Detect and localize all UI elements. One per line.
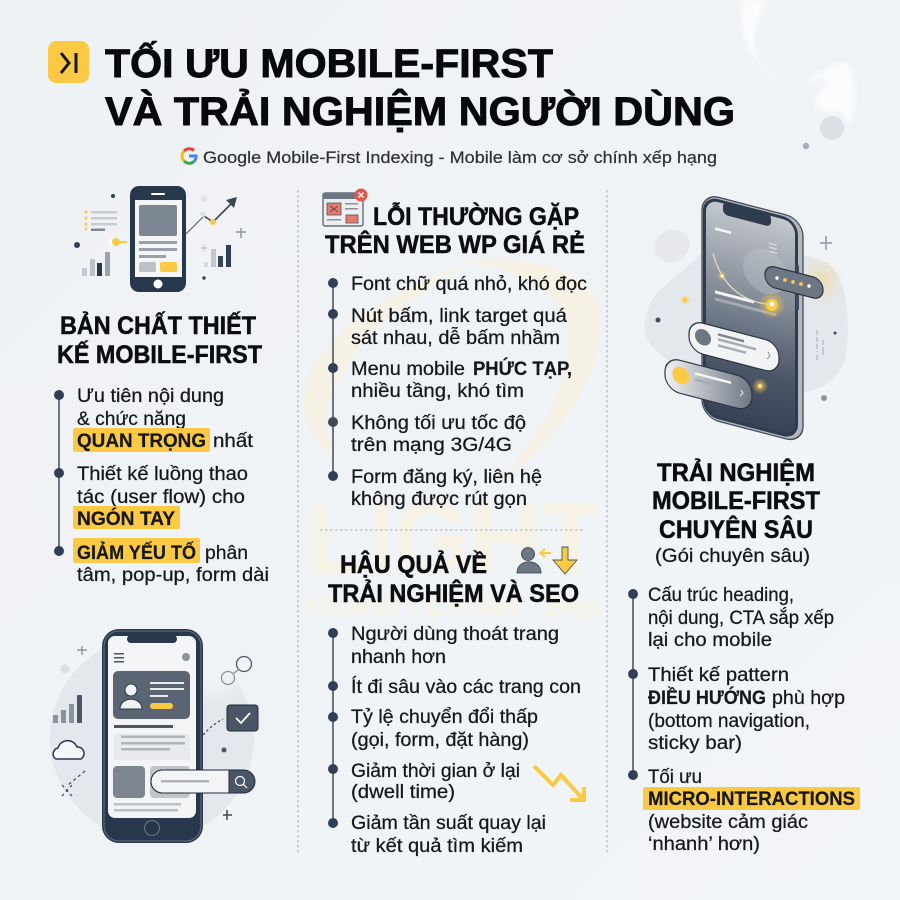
subtitle with Google icon: Google Mobile-First Indexing - Mobile làm cơ sở chính xếp hạng xyxy=(203,148,717,167)
list: loi thuong gap: không được rút gọn xyxy=(351,489,527,510)
heading: hau qua with icons: TRẢI NGHIỆM VÀ SEO xyxy=(328,578,579,608)
list: hau qua: (gọi, form, đặt hàng) xyxy=(351,730,529,751)
illustration: phone with charts xyxy=(74,186,246,292)
list: ban chat xyxy=(54,386,269,586)
list: loi thuong gap: Nút bấm, link target quá xyxy=(351,306,567,327)
list: hau qua: Ít đi sâu vào các trang con xyxy=(351,677,581,698)
list: hau qua: nhanh hơn xyxy=(351,647,446,668)
title: VÀ TRẢI NGHIỆM NGƯỜI DÙNG xyxy=(105,88,735,134)
heading: trai nghiem chuyen sau: CHUYÊN SÂU xyxy=(659,514,813,544)
list: ban chat: phân xyxy=(205,543,248,564)
list: chuyen sau: phù hợp xyxy=(772,688,845,709)
list: chuyen sau: lại cho mobile xyxy=(648,630,772,651)
list: loi thuong gap: PHỨC TẠP, xyxy=(473,358,572,380)
heading: ban chat: BẢN CHẤT THIẾT xyxy=(60,310,256,340)
list: loi thuong gap xyxy=(328,274,587,510)
list: hau qua: Giảm tần suất quay lại xyxy=(351,813,546,834)
heading: ban chat: KẾ MOBILE-FIRST xyxy=(57,340,262,369)
list: chuyen sau: ĐIỀU HƯỚNG xyxy=(648,687,766,709)
list: chuyen sau: ‘nhanh’ hơn) xyxy=(648,834,760,855)
search bar xyxy=(151,770,255,793)
illustration: phone with search bar xyxy=(50,629,258,843)
list: chuyen sau: MICRO-INTERACTIONS xyxy=(648,789,855,810)
list: hau qua: Người dùng thoát trang xyxy=(351,624,559,645)
list: ban chat: Ưu tiên nội dung xyxy=(77,386,224,407)
heading: trai nghiem chuyen sau: TRẢI NGHIỆM xyxy=(657,457,815,487)
list: hau qua: Giảm thời gian ở lại xyxy=(351,761,520,782)
list: hau qua: (dwell time) xyxy=(351,782,455,803)
arrow: falling yellow trend xyxy=(534,766,584,800)
list: ban chat: tác (user flow) cho xyxy=(77,487,245,508)
title: TỐI ƯU MOBILE-FIRST xyxy=(105,40,553,86)
heading: hau qua with icons xyxy=(328,547,579,608)
column dividers xyxy=(298,190,607,853)
list: ban chat: tâm, pop-up, form dài xyxy=(77,565,269,586)
list: ban chat: Thiết kế luồng thao xyxy=(77,464,248,485)
list: loi thuong gap: trên mạng 3G/4G xyxy=(351,435,512,456)
list: loi thuong gap: Font chữ quá nhỏ, khó đọc xyxy=(351,274,587,295)
heading: trai nghiem chuyen sau xyxy=(652,457,820,567)
heading: loi thuong gap with icon xyxy=(323,188,585,259)
list: loi thuong gap: Form đăng ký, liên hệ xyxy=(351,467,542,488)
list: chuyen sau: Tối ưu xyxy=(648,767,702,788)
list: ban chat: nhất xyxy=(213,431,254,452)
decorative white swoosh and dots, top right xyxy=(741,0,855,149)
illustration: tilted phone with floating cards xyxy=(644,183,848,448)
icon: Google G xyxy=(182,149,196,163)
heading: trai nghiem chuyen sau: (Gói chuyên sâu) xyxy=(655,546,810,567)
list: loi thuong gap: Không tối ưu tốc độ xyxy=(351,413,526,434)
heading: trai nghiem chuyen sau: MOBILE-FIRST xyxy=(652,487,820,515)
list: ban chat: & chức năng xyxy=(77,409,186,430)
list: chuyen sau: nội dung, CTA sắp xếp xyxy=(648,607,834,629)
watermark logo: Nhanh - Chuẩn - Đẹp xyxy=(305,591,602,621)
list: hau qua xyxy=(328,624,581,857)
list: chuyen sau xyxy=(628,585,860,855)
list: chuyen sau: (bottom navigation, xyxy=(648,711,810,732)
list: chuyen sau: Cấu trúc heading, xyxy=(648,585,794,606)
icon: yellow skip badge xyxy=(48,41,89,83)
icon: broken browser window xyxy=(323,188,368,226)
list: hau qua: từ kết quả tìm kiếm xyxy=(351,836,523,857)
list: ban chat: GIẢM YẾU TỐ xyxy=(77,542,196,564)
list: chuyen sau: (website cảm giác xyxy=(648,812,808,833)
title xyxy=(105,40,735,134)
heading: loi thuong gap with icon: LỖI THƯỜNG GẶP xyxy=(373,201,579,231)
list: chuyen sau: Thiết kế pattern xyxy=(648,665,789,686)
list: loi thuong gap: nhiều tầng, khó tìm xyxy=(351,381,524,402)
heading: hau qua with icons: HẬU QUẢ VỀ xyxy=(340,549,487,579)
watermark logo xyxy=(304,259,602,621)
watermark logo: LIGHT xyxy=(306,481,601,595)
icon: user leaving and down arrow xyxy=(517,547,577,574)
list: hau qua: Tỷ lệ chuyển đổi thấp xyxy=(351,707,538,728)
list: loi thuong gap: Menu mobile xyxy=(351,359,465,380)
list: chuyen sau: sticky bar) xyxy=(648,733,742,754)
list: loi thuong gap: sát nhau, dễ bấm nhầm xyxy=(351,327,560,349)
list: ban chat: NGÓN TAY xyxy=(77,508,175,530)
list: ban chat: QUAN TRỌNG xyxy=(77,431,206,452)
heading: ban chat xyxy=(57,310,262,369)
heading: loi thuong gap with icon: TRÊN WEB WP GIÁ RẺ xyxy=(325,229,585,259)
